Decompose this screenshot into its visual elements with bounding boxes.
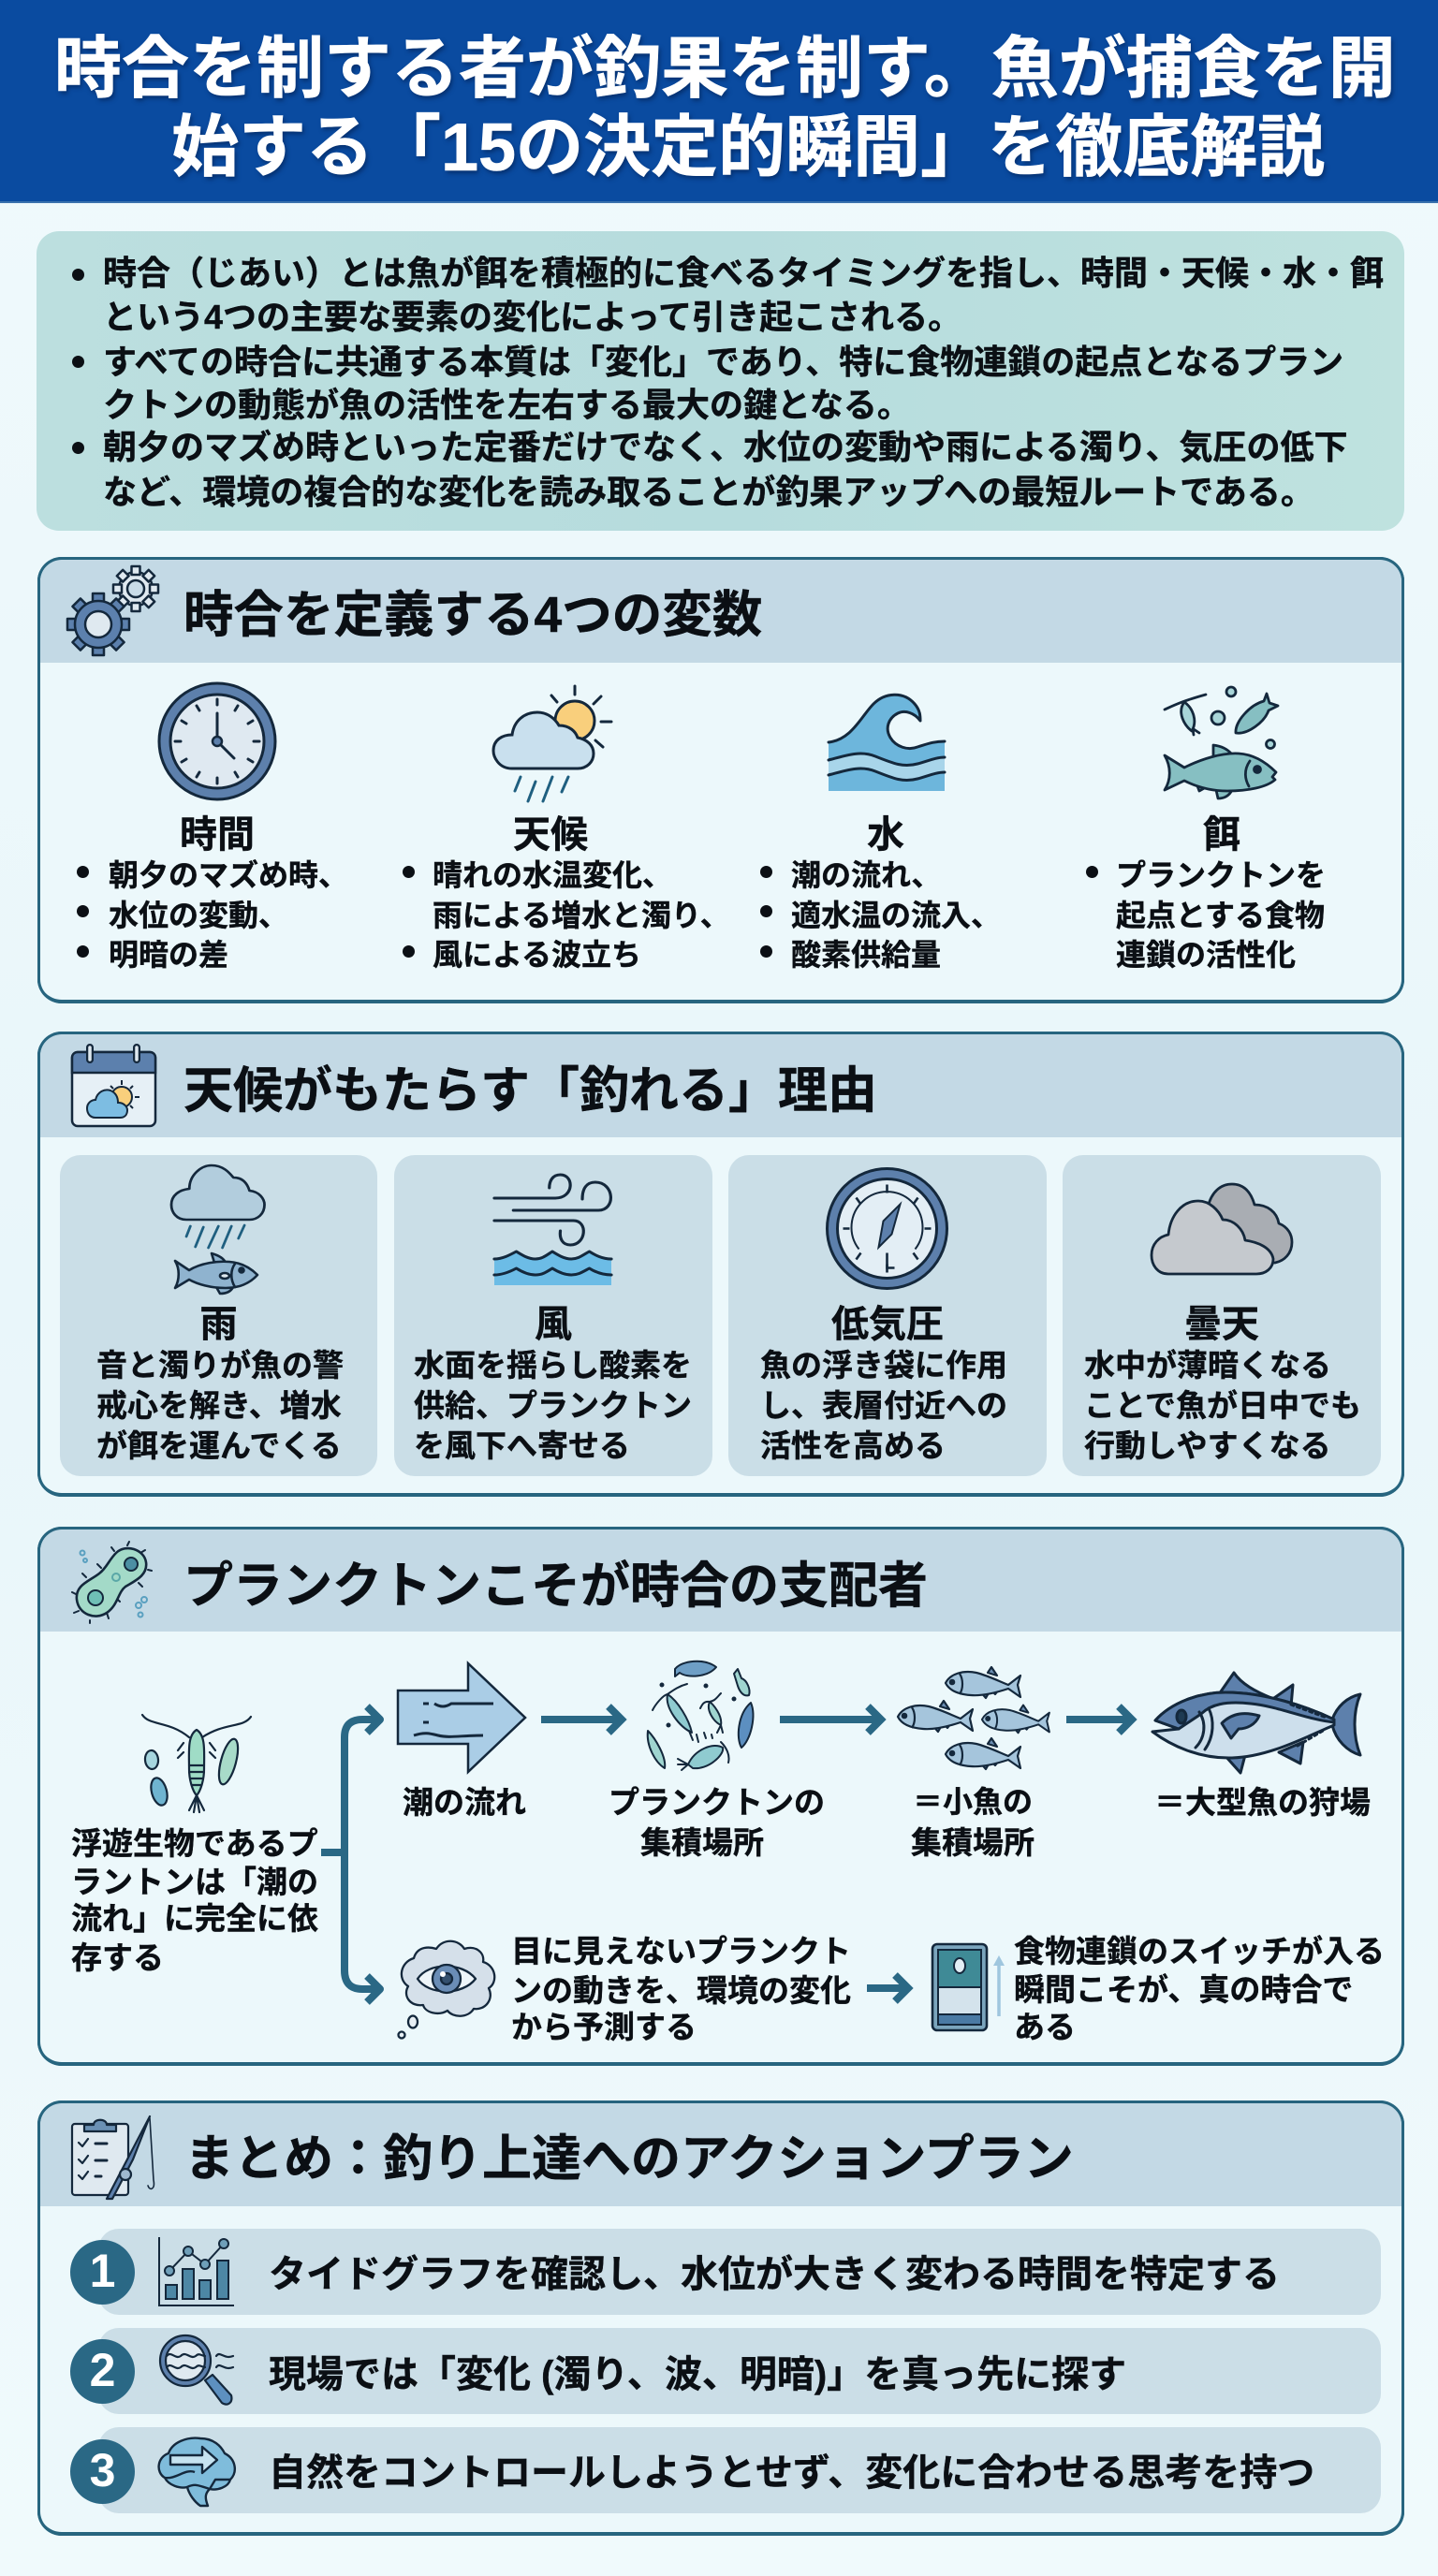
card: rain: 戒心を解き、増水 — [96, 1388, 342, 1423]
number 1 — [70, 2240, 135, 2305]
text: switch moment: 食物連鎖のスイッチが入る — [1014, 1934, 1385, 1969]
icon: gears — [66, 565, 159, 657]
description: 水中が薄暗くなる — [1084, 1348, 1331, 1383]
icon: wave — [828, 693, 946, 791]
column: time: 朝夕のマズめ時、 — [109, 858, 348, 892]
label: plankton gathering: 集積場所 — [640, 1825, 764, 1860]
diagram: food chain — [71, 1661, 1385, 2044]
description: 音と濁りが魚の警 — [96, 1348, 344, 1383]
label: big fish hunting ground: ＝大型魚の狩場 — [1154, 1785, 1371, 1820]
icon: fish and plankton — [1163, 685, 1279, 799]
column: bait: 連鎖の活性化 — [1116, 938, 1296, 972]
panel: action plan — [37, 2100, 1404, 2536]
column: bait — [1086, 685, 1326, 972]
icon: wind and waves — [492, 1174, 613, 1285]
text: predict — [511, 1934, 851, 2044]
column: time: 明暗の差 — [109, 938, 228, 972]
card: rain — [60, 1155, 377, 1476]
icon: copepod — [140, 1713, 253, 1814]
section heading — [40, 2103, 1401, 2206]
column: water: 酸素供給量 — [791, 938, 941, 972]
icon: clock — [157, 681, 277, 801]
icon: brain with arrow — [157, 2437, 236, 2507]
label: small fish gathering — [911, 1785, 1034, 1860]
column: water — [760, 693, 1001, 972]
column: weather: 雨による増水と濁り、 — [433, 899, 730, 932]
arrow 3 — [1066, 1704, 1137, 1735]
text: plankton: 存する — [71, 1940, 164, 1975]
column: weather: 晴れの水温変化、 — [433, 858, 672, 892]
label: plankton gathering: プランクトンの — [609, 1785, 825, 1820]
section title: まとめ：釣り上達へのアクションプラン — [184, 2131, 1074, 2187]
label: 雨 — [200, 1304, 238, 1345]
arrows: branch connector — [321, 1704, 384, 2005]
icon: sun and rain cloud — [492, 685, 612, 803]
card: cloudy: ことで魚が日中でも — [1084, 1388, 1361, 1423]
card: rain: が餌を運んでくる — [96, 1428, 342, 1463]
icon: barometer — [826, 1167, 948, 1290]
icon: eye in thought cloud — [397, 1939, 496, 2040]
number 2: 2 — [90, 2344, 115, 2396]
label: current: 潮の流れ — [403, 1785, 526, 1820]
panel: weather reasons — [37, 1032, 1404, 1497]
panel: summary: クトンの動態が魚の活性を左右する最大の鍵となる。 — [103, 386, 911, 424]
column: time: 水位の変動、 — [109, 899, 288, 932]
number 1: 1 — [90, 2245, 115, 2297]
text: plankton: ラントンは「潮の — [71, 1865, 318, 1899]
label: 時間 — [180, 814, 255, 856]
column: bait: 起点とする食物 — [1116, 899, 1325, 932]
panel: summary: 時合（じあい）とは魚が餌を積極的に食べるタイミングを指し、時間・天候・水・餌 — [103, 254, 1384, 292]
icon: clipboard and rod — [71, 2115, 155, 2200]
column: water: 潮の流れ、 — [791, 858, 941, 892]
title banner — [0, 0, 1438, 203]
text: plankton: 流れ」に完全に依 — [71, 1901, 318, 1936]
description: 水面を揺らし酸素を — [414, 1348, 692, 1383]
panel: summary: すべての時合に共通する本質は「変化」であり、特に食物連鎖の起点となるプラン — [103, 343, 1343, 381]
text: predict: ンの動きを、環境の変化 — [511, 1973, 851, 2008]
icon: tide chart — [158, 2237, 234, 2306]
icon: microbe — [71, 1541, 153, 1624]
icon: current arrow — [397, 1661, 527, 1775]
text: predict: から予測する — [511, 2010, 697, 2044]
arrow 2 — [780, 1704, 887, 1735]
card: wind: 供給、プランクトン — [414, 1388, 692, 1423]
section heading — [40, 1034, 1401, 1137]
card: low pressure: し、表層付近への — [760, 1388, 1007, 1423]
panel: summary — [37, 231, 1404, 531]
card: low pressure — [728, 1155, 1047, 1476]
step text: 自然をコントロールしようとせず、変化に合わせる思考を持つ — [269, 2452, 1314, 2494]
panel: summary: という4つの主要な要素の変化によって引き起こされる。 — [103, 298, 961, 336]
icon: clouds — [1150, 1183, 1294, 1275]
card: cloudy — [1063, 1155, 1381, 1476]
panel: summary: 朝夕のマズめ時といった定番だけでなく、水位の変動や雨による濁り、気圧の低下 — [103, 428, 1347, 466]
text: plankton: 浮遊生物であるプ — [71, 1826, 318, 1861]
icon: plankton cluster — [646, 1661, 755, 1771]
panel: plankton — [37, 1527, 1404, 2066]
card: cloudy: 行動しやすくなる — [1084, 1428, 1331, 1463]
label: small fish gathering: 集積場所 — [911, 1825, 1034, 1860]
label: small fish gathering: ＝小魚の — [913, 1785, 1033, 1819]
label: 曇天 — [1184, 1304, 1259, 1345]
number 2 — [70, 2339, 135, 2404]
icon: large tuna — [1151, 1671, 1362, 1775]
title line 1: 時合を制する者が釣果を制す。魚が捕食を開 — [54, 32, 1396, 107]
arrow 4 — [867, 1972, 914, 2004]
section heading — [40, 560, 1401, 663]
step 3 — [70, 2427, 1381, 2513]
icon: school of small fish — [897, 1666, 1050, 1771]
text: plankton — [71, 1826, 318, 1975]
icon: switch — [931, 1943, 1005, 2031]
section title: 天候がもたらす「釣れる」理由 — [183, 1063, 877, 1119]
step 1 — [70, 2229, 1381, 2315]
label: 餌 — [1203, 814, 1240, 856]
card: low pressure: 活性を高める — [760, 1428, 946, 1463]
card: wind — [394, 1155, 712, 1476]
section heading — [40, 1530, 1401, 1632]
text: switch moment: 瞬間こそが、真の時合で — [1014, 1972, 1353, 2007]
label: 天候 — [513, 814, 588, 856]
text: predict: 目に見えないプランクト — [511, 1934, 851, 1969]
icon: magnifier on waves — [159, 2334, 234, 2406]
icon: calendar with weather — [71, 1044, 157, 1127]
column: weather: 風による波立ち — [433, 938, 641, 972]
label: 低気圧 — [831, 1304, 944, 1345]
section title: 時合を定義する4つの変数 — [183, 588, 762, 643]
text: switch moment: ある — [1014, 2010, 1076, 2044]
section title: プランクトンこそが時合の支配者 — [183, 1559, 928, 1614]
icon: rain and fish — [170, 1164, 266, 1295]
column: water: 適水温の流入、 — [791, 899, 1001, 932]
panel: 4 variables — [37, 557, 1404, 1003]
label: 水 — [867, 814, 904, 856]
step 2 — [70, 2328, 1381, 2414]
column: bait: プランクトンを — [1116, 858, 1326, 892]
title line 2: 始する「15の決定的瞬間」を徹底解説 — [171, 110, 1325, 185]
arrow 1 — [541, 1704, 627, 1735]
step text: タイドグラフを確認し、水位が大きく変わる時間を特定する — [269, 2254, 1280, 2295]
label: plankton gathering — [609, 1785, 825, 1860]
step text: 現場では「変化 (濁り、波、明暗)」を真っ先に探す — [269, 2354, 1126, 2395]
label: 風 — [535, 1304, 572, 1345]
column: weather — [403, 685, 730, 972]
panel: summary: など、環境の複合的な変化を読み取ることが釣果アップへの最短ルートである。 — [103, 473, 1314, 511]
description: 魚の浮き袋に作用 — [760, 1348, 1007, 1383]
number 3 — [70, 2439, 135, 2504]
number 3: 3 — [90, 2444, 115, 2496]
text: switch moment — [1014, 1934, 1385, 2044]
column: time — [77, 681, 348, 972]
card: wind: を風下へ寄せる — [414, 1428, 630, 1463]
